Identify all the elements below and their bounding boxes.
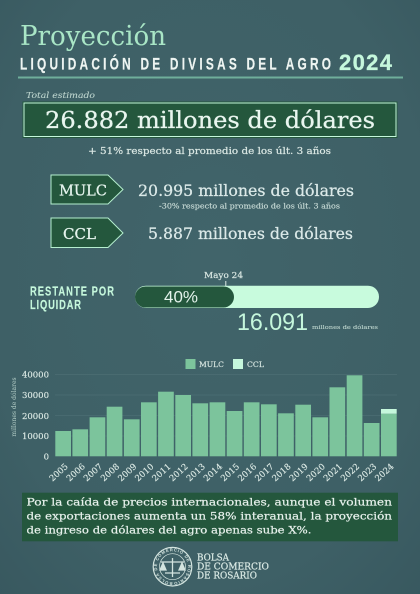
total estimate panel: Total estimado <box>26 91 95 101</box>
icon: CCL arrow tag <box>51 218 123 248</box>
x axis years: 2019 <box>288 462 311 484</box>
legend <box>186 359 264 369</box>
icon: MULC arrow tag <box>51 175 123 204</box>
x axis years: 2020 <box>305 462 328 484</box>
callout: summary text: de exportaciones aumenta un 58% interanual, la proyección <box>26 512 393 522</box>
progress: remaining to liquidate: RESTANTE POR <box>30 286 114 299</box>
callout: summary text <box>22 493 398 541</box>
logo: Bolsa de Comercio de Rosario: DE ROSARIO <box>197 572 257 582</box>
y axis: 0 <box>44 452 49 462</box>
y axis: 30000 <box>22 391 49 401</box>
progress: remaining to liquidate: LIQUIDAR <box>30 299 81 312</box>
y axis <box>11 370 49 462</box>
x axis years: 2023 <box>356 462 379 484</box>
progress: remaining to liquidate: 40% <box>164 289 198 307</box>
icon: seal with scales: BOLSA DE COMERCIO DE ROSARIO <box>154 548 191 586</box>
x axis years: 2013 <box>185 462 208 484</box>
y axis: millones de dólares <box>11 377 18 437</box>
bars <box>55 375 397 456</box>
y axis: 10000 <box>22 432 49 442</box>
total estimate panel: + 51% respecto al promedio de los últ. 3 años <box>88 146 331 157</box>
x axis years <box>48 462 396 484</box>
title: 2024 <box>339 50 393 75</box>
bar chart: MULC and CCL by year <box>11 359 397 484</box>
x axis years: 2010 <box>133 462 156 484</box>
progress: remaining to liquidate: 16.091 <box>237 309 308 336</box>
title <box>20 21 393 75</box>
legend: CCL <box>247 360 264 369</box>
total estimate panel: 26.882 millones de dólares <box>45 108 375 134</box>
y axis: 40000 <box>22 370 49 380</box>
x axis years: 2024 <box>373 462 396 484</box>
x axis years: 2017 <box>253 462 276 484</box>
x axis years: 2015 <box>219 462 242 484</box>
x axis years: 2021 <box>322 462 345 484</box>
x axis years: 2011 <box>151 462 173 484</box>
MULC row <box>51 175 354 210</box>
progress: remaining to liquidate <box>30 271 379 336</box>
progress: remaining to liquidate: Mayo 24 <box>204 271 243 281</box>
x axis years: 2005 <box>48 462 71 484</box>
total estimate panel <box>22 91 398 157</box>
title: Proyección <box>20 21 166 52</box>
callout: summary text: Por la caída de precios internacionales, aunque el volumen <box>26 498 393 509</box>
logo: Bolsa de Comercio de Rosario: BOLSA <box>197 553 230 563</box>
x axis years: 2012 <box>168 462 191 484</box>
MULC row: -30% respecto al promedio de los últ. 3 años <box>159 202 340 210</box>
CCL row: 5.887 millones de dólares <box>148 224 353 243</box>
logo: Bolsa de Comercio de Rosario <box>152 546 269 587</box>
x axis years: 2007 <box>82 462 105 484</box>
x axis years: 2014 <box>202 462 225 484</box>
logo: Bolsa de Comercio de Rosario: DE COMERCIO <box>197 562 269 572</box>
x axis years: 2008 <box>99 462 122 484</box>
icon: MULC arrow tag: MULC <box>59 184 107 200</box>
x axis years: 2006 <box>65 462 88 484</box>
x axis years: 2016 <box>236 462 259 484</box>
MULC row: 20.995 millones de dólares <box>138 181 354 200</box>
icon: CCL arrow tag: CCL <box>63 227 96 243</box>
CCL row <box>51 218 353 248</box>
x axis years: 2009 <box>116 462 139 484</box>
callout: summary text: de ingreso de dólares del agro apenas sube X%. <box>26 526 312 536</box>
title: LIQUIDACIÓN DE DIVISAS DEL AGRO <box>20 53 331 74</box>
legend: MULC <box>199 360 224 369</box>
y axis: 20000 <box>22 412 49 422</box>
progress: remaining to liquidate: millones de dólares <box>312 324 378 331</box>
x axis years: 2018 <box>271 462 293 484</box>
x axis years: 2022 <box>339 462 362 484</box>
